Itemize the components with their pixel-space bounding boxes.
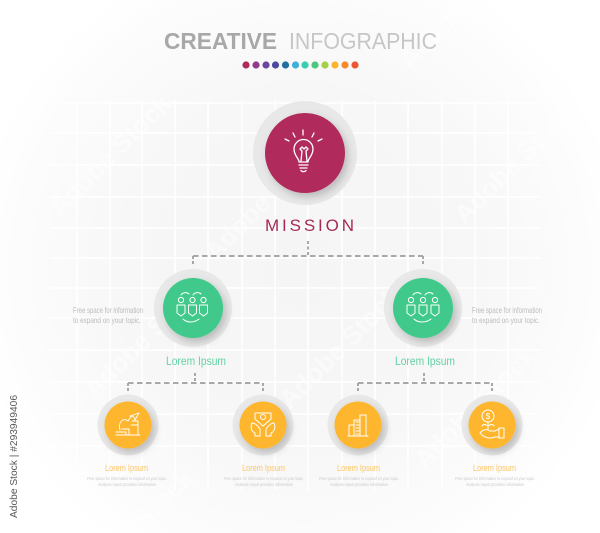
text: Adobe [8,6,86,84]
yellow node 2 text: Lorem Ipsum [242,463,285,473]
title [164,28,437,54]
yellow node 4: $ [486,412,491,421]
colour dots row [242,61,359,69]
yellow node 1 text: Lorem Ipsum [105,463,148,473]
yellow node 4 [462,394,522,456]
text: Adobe Stock [198,132,332,266]
connector: left green node to yellow nodes [128,373,263,393]
yellow node 1 text: Analysis report provides information [98,482,157,487]
right green note: Free space for information [472,306,542,315]
left green note: to expand on your topic. [73,316,141,325]
yellow node 4 text: Lorem Ipsum [473,463,516,473]
left green node [154,269,232,347]
heading: mission: MISSION [265,216,354,235]
right green note [472,306,542,325]
yellow node 1 text [87,463,167,487]
left green label: Lorem Ipsum [166,356,226,368]
yellow node 3 text: Analysis report provides information [330,482,389,487]
yellow node 4 text [455,463,535,487]
icon: hand holding dollar coin [480,410,504,438]
icon: team rotation [407,293,439,322]
text: Adobe Stock [43,88,177,222]
icon: team rotation [177,293,208,322]
yellow node 2 text [224,463,304,487]
icon: bar chart [348,415,368,436]
connector: mission to green nodes [193,241,423,266]
stock id caption: Adobe Stock | #293949406 [8,395,20,518]
yellow node 2 text: Analysis report provides information [235,482,294,487]
yellow node 2 text: Free space for information to expand on your topic. [224,476,304,481]
icon: growth chart with coins [116,413,140,435]
yellow node 3 text [319,463,399,487]
left green note: Free space for information [73,306,143,315]
right green label: Lorem Ipsum [395,356,455,368]
text: Adobe Stock [273,280,407,414]
right green node [384,269,462,347]
right green note: to expand on your topic. [472,316,540,325]
mission node [253,101,357,205]
yellow node 1 text: Free space for information to expand on your topic. [87,476,167,481]
text: Adobe Stock [448,95,582,229]
yellow node 3 text: Free space for information to expand on your topic. [319,476,399,481]
yellow node 1 [98,394,158,456]
yellow node 2 [232,394,294,456]
yellow node 3 text: Lorem Ipsum [337,463,380,473]
yellow node 4 text: Analysis report provides information [466,482,525,487]
text: Adobe Stock [408,340,542,474]
connector: right green node to yellow nodes [358,373,492,393]
title: INFOGRAPHIC [289,28,437,54]
text: Stock [128,463,200,533]
icon: light bulb [285,130,322,172]
title: CREATIVE [164,28,277,54]
text: Adobe Stock [78,270,212,404]
yellow node 3 [328,394,388,456]
left green note [73,306,143,325]
yellow node 4 text: Free space for information to expand on your topic. [455,476,535,481]
icon: hands holding money [251,413,275,436]
